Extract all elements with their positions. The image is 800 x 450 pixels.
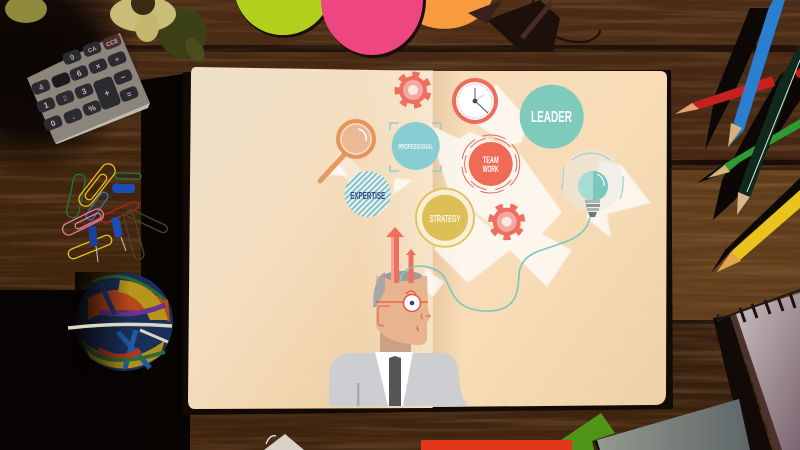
calculator: 3 — [80, 86, 88, 96]
calculator: + — [103, 87, 111, 99]
eyeglasses — [468, 0, 600, 52]
hair — [373, 272, 385, 307]
glasses — [376, 294, 428, 312]
green paper sheet — [561, 413, 615, 450]
icon: clock — [452, 78, 498, 124]
calculator: 2 — [61, 93, 69, 103]
paper clips and push pins — [61, 161, 169, 262]
head — [376, 276, 431, 345]
calculator: × — [94, 61, 102, 72]
tie — [389, 356, 401, 406]
connecting cable — [400, 217, 590, 311]
colored pencils — [675, 0, 800, 273]
open notebook shadow — [141, 70, 673, 450]
calculator: 4 — [37, 82, 45, 92]
calculator: ÷ — [114, 54, 121, 64]
jacket pocket line — [357, 383, 360, 406]
notebook at lower right — [713, 290, 800, 450]
calculator: = — [125, 89, 133, 100]
neck — [380, 330, 411, 352]
red paper sheet — [421, 440, 572, 450]
calculator: 6 — [75, 68, 83, 78]
badge: team work: WORK — [483, 164, 499, 174]
badge: team work: TEAM — [483, 155, 499, 165]
calculator: 1 — [42, 100, 50, 110]
badge: strategy: STRATEGY — [430, 214, 461, 225]
rubber band ball — [68, 272, 173, 372]
open skull — [384, 271, 422, 281]
eyebrow — [406, 291, 416, 294]
icon: gear top — [394, 71, 432, 109]
calculator: % — [87, 103, 97, 114]
calculator: − — [119, 72, 127, 83]
growth arrows — [386, 227, 416, 283]
calculator: . — [71, 112, 76, 121]
calculator — [27, 33, 150, 144]
binder clip — [264, 434, 304, 450]
badge: team work — [454, 127, 527, 201]
badge: leader — [520, 85, 584, 149]
badge: expertise — [345, 171, 391, 217]
icon: light bulb — [561, 150, 623, 217]
grey paper sheet — [594, 399, 751, 450]
ear — [378, 306, 390, 326]
icon: magnifying glass — [320, 121, 378, 198]
sticky note: green circle — [236, 0, 333, 38]
nose and mouth — [417, 314, 431, 331]
calculator: CCE — [106, 38, 120, 48]
businessman figure — [329, 271, 468, 406]
jacket — [329, 353, 468, 406]
badge: expertise: EXPERTISE — [350, 190, 385, 202]
shirt — [375, 352, 413, 406]
flower decoration — [5, 0, 208, 65]
sticky note: pink circle — [321, 0, 426, 58]
badge: professional — [390, 122, 441, 171]
long white diagonal shadows — [330, 84, 651, 297]
open notebook pages — [188, 67, 667, 409]
badge: strategy — [416, 189, 474, 247]
badge: leader: LEADER — [531, 109, 572, 126]
calculator: 9 — [68, 52, 76, 62]
sticky note: orange circle — [397, 0, 492, 29]
icon: gear lower — [485, 200, 528, 243]
calculator: CA — [87, 46, 98, 55]
calculator: 0 — [49, 118, 57, 128]
badge: professional: PROFESSIONAL — [398, 142, 433, 151]
